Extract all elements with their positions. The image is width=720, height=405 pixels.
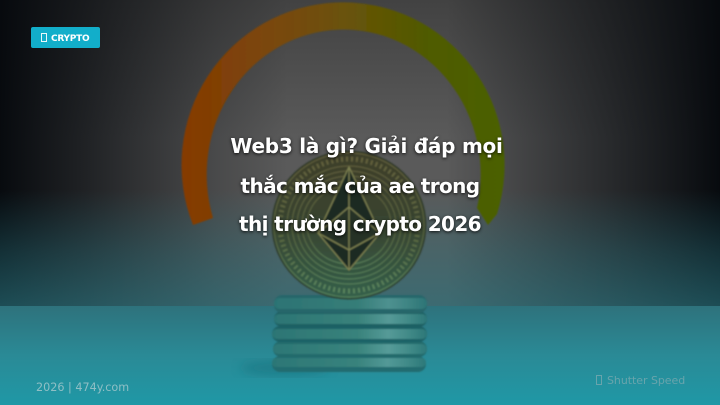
wall: [0, 0, 720, 306]
ethereum diamond: [318, 167, 380, 270]
title line 1: Web3 là gì? Giải đáp mọi: [230, 134, 503, 158]
date and site: 2026 | 474y.com: [36, 381, 129, 394]
speedometer arc: [182, 2, 505, 225]
teal glow on the wall: [0, 0, 720, 306]
title line 3: thị trường crypto 2026: [239, 212, 481, 236]
title: [230, 134, 503, 238]
category badge: CRYPTO: [51, 34, 89, 44]
ethereum coin: [272, 151, 426, 299]
side vignette: [0, 0, 720, 306]
category badge: [31, 27, 100, 48]
stack shadow: [240, 360, 330, 376]
table: [0, 306, 720, 405]
coin stack: [272, 295, 427, 372]
title line 2: thắc mắc của ae trong: [241, 174, 479, 198]
image credit: Shutter Speed: [607, 374, 685, 387]
